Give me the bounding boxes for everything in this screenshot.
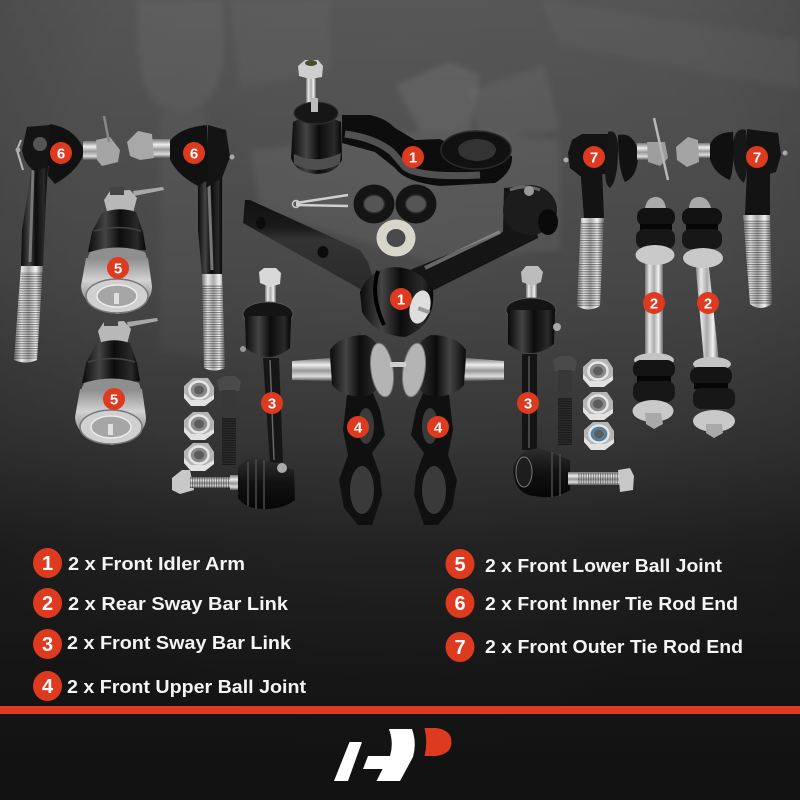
badge 7 left — [583, 146, 605, 168]
badge 4 left: 4 — [354, 420, 363, 436]
item 6 — [446, 588, 738, 618]
badge 6 left: 6 — [57, 146, 65, 162]
badge 4 left — [347, 416, 369, 438]
badge 2 right: 2 — [704, 296, 712, 312]
item 2 — [33, 588, 289, 618]
item 1 — [33, 548, 245, 578]
item 3: 2 x Front Sway Bar Link — [67, 632, 292, 653]
badge 7 right: 7 — [753, 150, 761, 166]
badge 6 right — [183, 142, 205, 164]
part: outer tie rod end left — [564, 118, 668, 310]
brand logo — [334, 728, 452, 781]
hardware: cotter pin and washers — [292, 184, 436, 256]
item 7 — [446, 632, 743, 662]
part: front sway bar link right — [506, 266, 634, 497]
part: outer tie rod end right — [676, 129, 788, 308]
parts list right — [446, 549, 743, 662]
badge 2 right — [697, 292, 719, 314]
ghosted vehicle suspension — [138, 0, 800, 360]
item 5 — [446, 549, 722, 579]
item 5: 5 — [454, 554, 466, 576]
item 3: 3 — [42, 634, 53, 656]
item 1: 1 — [42, 553, 53, 575]
badge 3 left: 3 — [268, 396, 276, 412]
badge 7 left: 7 — [590, 150, 598, 166]
item 6: 2 x Front Inner Tie Rod End — [485, 593, 738, 614]
part: upper ball joint right — [397, 335, 504, 525]
part: inner tie rod end right — [127, 125, 234, 370]
badge 5 top: 5 — [114, 260, 122, 278]
badge 3 right — [517, 392, 539, 414]
badge 3 right: 3 — [524, 396, 532, 412]
parts list left — [33, 548, 306, 701]
part: lower idler arm — [243, 185, 558, 337]
part: rear sway bar link right — [682, 197, 735, 438]
item 7: 2 x Front Outer Tie Rod End — [485, 636, 743, 657]
badge 2 left: 2 — [650, 296, 658, 312]
item 3 — [33, 629, 292, 659]
part: upper idler arm — [291, 60, 512, 186]
badge 1 — [402, 146, 424, 168]
hardware: right bolt and nuts — [553, 356, 614, 450]
badge 2 left — [643, 292, 665, 314]
part: lower ball joint top — [81, 187, 164, 314]
part: lower ball joint bottom — [75, 318, 158, 445]
badge 1 lower: 1 — [397, 292, 405, 308]
item 7: 7 — [454, 637, 466, 659]
item 4: 2 x Front Upper Ball Joint — [67, 676, 306, 697]
badge 1: 1 — [409, 150, 417, 166]
part: upper ball joint left — [292, 335, 399, 525]
badge 7 right — [746, 146, 768, 168]
hardware: left bolt and nuts — [184, 376, 241, 471]
badge 4 right — [427, 416, 449, 438]
badge 6 right: 6 — [190, 146, 198, 162]
badge 4 right: 4 — [434, 420, 443, 436]
badge 6 left — [50, 142, 72, 164]
item 6: 6 — [454, 593, 466, 615]
badge 5 bottom: 5 — [110, 392, 118, 408]
badge 1 lower — [390, 288, 412, 310]
item 4: 4 — [42, 676, 54, 698]
item 2: 2 — [42, 593, 53, 615]
red divider band — [0, 706, 800, 714]
part: rear sway bar link left — [632, 197, 675, 429]
badge 3 left — [261, 392, 283, 414]
item 2: 2 x Rear Sway Bar Link — [68, 593, 289, 614]
item 5: 2 x Front Lower Ball Joint — [485, 555, 722, 576]
item 4 — [33, 671, 306, 701]
item 1: 2 x Front Idler Arm — [68, 553, 245, 574]
part: front sway bar link left — [172, 268, 295, 509]
part: inner tie rod end left — [14, 116, 120, 362]
